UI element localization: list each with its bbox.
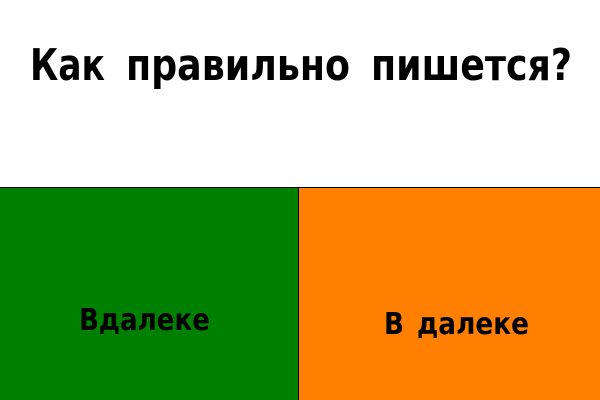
label: Вдалеке: Вдалеке [79, 303, 210, 338]
label: В далеке: далеке [417, 307, 529, 342]
panel: orange option [299, 187, 600, 400]
title: Как [30, 40, 105, 91]
title: правильно [126, 40, 350, 91]
panel: green option [0, 187, 299, 400]
label: В далеке: В [384, 307, 404, 342]
